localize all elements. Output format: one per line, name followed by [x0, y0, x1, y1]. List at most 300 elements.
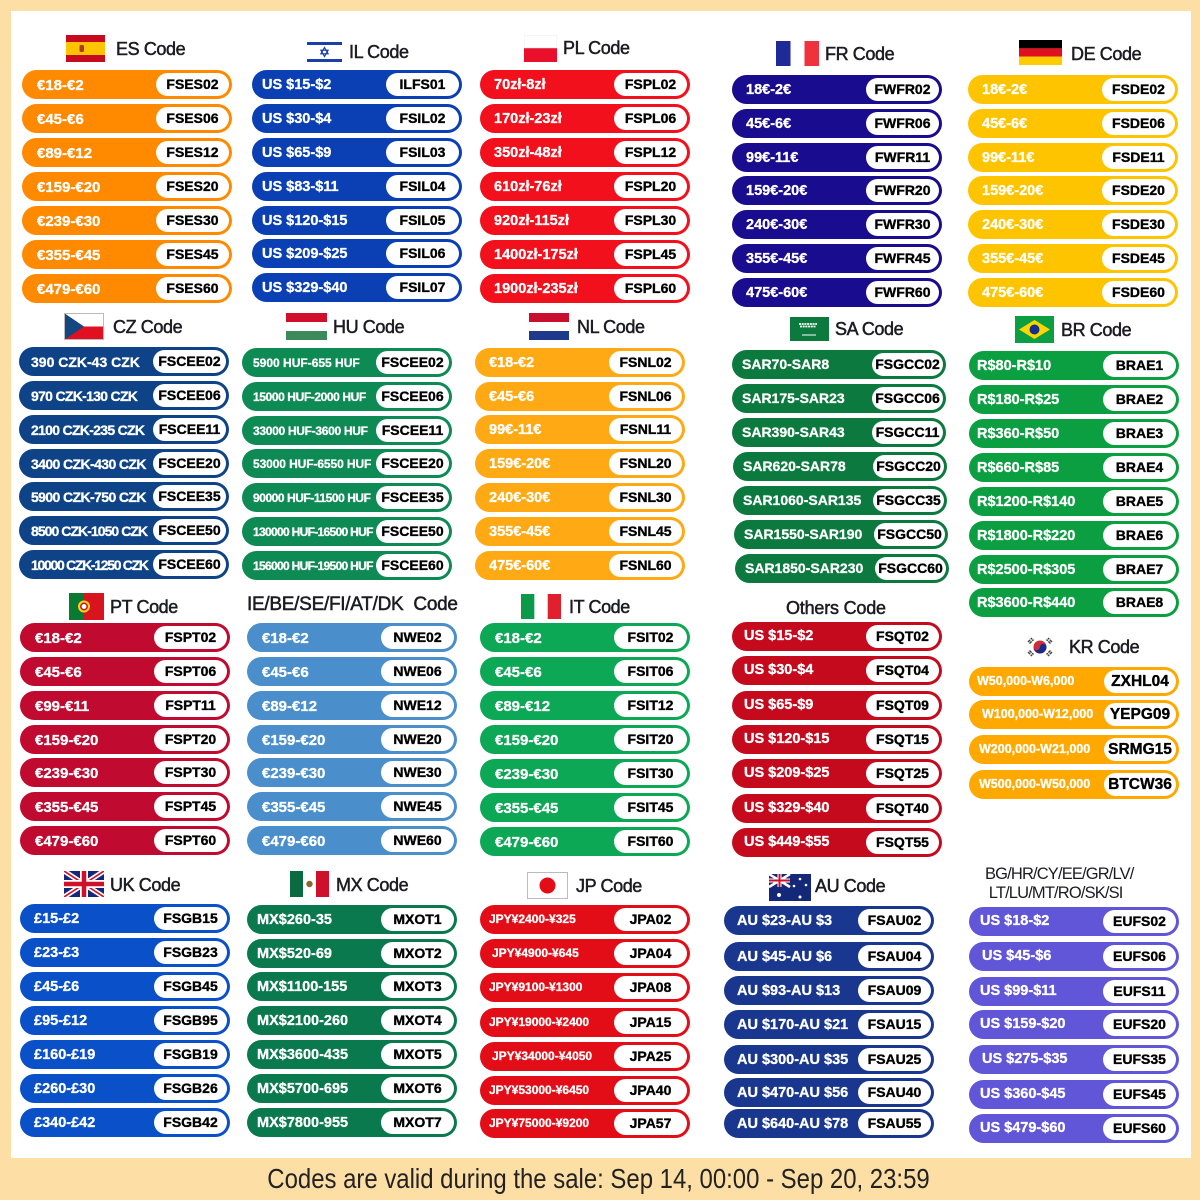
code row: 610zł-76zł FSPL20 [480, 172, 690, 201]
code row: AU $45-AU $6 FSAU04 [724, 942, 934, 971]
heading: AU Code [724, 871, 934, 901]
panel: AU codes [724, 871, 934, 1138]
code row: 99€-11€ FSDE11: 99€-11€ [982, 150, 1034, 166]
code row: 1900zł-235zł FSPL60: FSPL60 [625, 280, 676, 296]
code row: JPY¥2400-¥325 JPA02: JPA02 [630, 911, 671, 927]
code row: 159€-20€ FSDE20 [968, 176, 1178, 205]
code row: 350zł-48zł FSPL12: FSPL12 [625, 144, 676, 160]
code row: JPY¥4900-¥645 JPA04 [480, 939, 690, 968]
code row: MX$3600-435 MXOT5 [247, 1040, 457, 1069]
code row: 355€-45€ FWFR45: FWFR45 [874, 250, 930, 266]
code row: R$2500-R$305 BRAE7: R$2500-R$305 [977, 562, 1075, 578]
code row: €159-€20 NWE20: NWE20 [393, 731, 442, 747]
code row: 99€-11€ FWFR11: FWFR11 [875, 149, 930, 165]
code row: SAR620-SAR78 FSGCC20: FSGCC20 [876, 458, 941, 474]
code row: €479-€60 FSIT60: €479-€60 [495, 834, 558, 851]
code row: €355-€45 FSPT45: €355-€45 [35, 799, 98, 816]
code row: €239-€30 FSPT30: €239-€30 [35, 765, 98, 782]
code row: 18€-2€ FSDE02 [968, 75, 1178, 104]
code row: MX$1100-155 MXOT3: MXOT3 [393, 978, 442, 994]
heading text: HU Code [333, 317, 404, 337]
code row: 240€-30€ FWFR30: FWFR30 [874, 216, 930, 232]
code row: 45€-6€ FSDE06: 45€-6€ [982, 116, 1027, 132]
code row: US $209-$25 FSIL06: FSIL06 [400, 245, 445, 261]
code row: JPY¥53000-¥6450 JPA40: JPY¥53000-¥6450 [489, 1083, 589, 1097]
code row: 475€-60€ FSDE60: FSDE60 [1112, 284, 1165, 300]
code row: 99€-11€ FSDE11 [968, 143, 1178, 172]
code row: €479-€60 FSPT60 [20, 826, 230, 855]
code row: €45-€6 FSIT06: FSIT06 [628, 663, 673, 679]
icon: flag of Portugal [69, 593, 104, 620]
code row: 920zł-115zł FSPL30: FSPL30 [625, 212, 676, 228]
panel: IL codes [252, 42, 462, 302]
code row: JPY¥34000-¥4050 JPA25: JPY¥34000-¥4050 [492, 1049, 592, 1063]
code row: £160-£19 FSGB19 [20, 1040, 230, 1069]
code row: 53000 HUF-6550 HUF FSCEE20: FSCEE20 [381, 455, 444, 471]
code row: €45-€6 FSNL06: FSNL06 [619, 388, 672, 404]
code row: 1400zł-175zł FSPL45: 1400zł-175zł [494, 247, 578, 263]
code row: 170zł-23zł FSPL06 [480, 104, 690, 133]
code row: US $209-$25 FSIL06: US $209-$25 [262, 246, 347, 262]
code row: €18-€2 FSNL02 [475, 348, 685, 377]
heading: FR Code [776, 41, 894, 66]
code row: US $45-$6 EUFS06: US $45-$6 [982, 948, 1051, 964]
panel: FR codes [732, 41, 942, 307]
code row: US $65-$9 FSQT09: FSQT09 [876, 697, 929, 713]
code row: R$660-R$85 BRAE4 [969, 453, 1179, 482]
code row: AU $170-AU $21 FSAU15 [724, 1010, 934, 1039]
heading text: IT Code [569, 597, 630, 617]
code row: €479-€60 NWE60: €479-€60 [262, 833, 325, 850]
code row: MX$2100-260 MXOT4: MX$2100-260 [257, 1013, 348, 1029]
code row: JPY¥19000-¥2400 JPA15: JPA15 [630, 1014, 671, 1030]
code row: £23-£3 FSGB23: £23-£3 [34, 945, 79, 961]
code row: 355€-45€ FSNL45 [475, 517, 685, 546]
code row: 45€-6€ FSDE06 [968, 109, 1178, 138]
code row: 240€-30€ FSNL30: 240€-30€ [489, 490, 550, 506]
icon: flag of Israel [307, 42, 342, 62]
code row: €45-€6 NWE06: €45-€6 [262, 664, 309, 681]
code row: R$180-R$25 BRAE2: R$180-R$25 [977, 392, 1059, 408]
code row: €45-€6 NWE06 [247, 657, 457, 686]
code row: 240€-30€ FSNL30: FSNL30 [619, 489, 672, 505]
code row: W500,000-W50,000 BTCW36: W500,000-W50,000 [979, 777, 1090, 791]
code row: US $209-$25 FSQT25 [732, 759, 942, 788]
icon: flag of Poland [524, 35, 557, 62]
code row: 170zł-23zł FSPL06: FSPL06 [625, 110, 676, 126]
code row: US $18-$2 EUFS02: US $18-$2 [980, 913, 1049, 929]
code row: £95-£12 FSGB95 [20, 1006, 230, 1035]
code row: €355-€45 FSIT45 [480, 793, 690, 822]
code row: AU $640-AU $78 FSAU55: AU $640-AU $78 [737, 1116, 848, 1132]
heading: DE Code [1019, 40, 1142, 65]
code row: €18-€2 FSPT02 [20, 623, 230, 652]
code row: €159-€20 FSIT20: €159-€20 [495, 732, 558, 749]
code row: €239-€30 FSIT30 [480, 759, 690, 788]
code row: US $329-$40 FSQT40: FSQT40 [876, 800, 929, 816]
code row: €18-€2 FSNL02: €18-€2 [489, 355, 534, 371]
code row: MX$5700-695 MXOT6: MXOT6 [393, 1080, 442, 1096]
code row: JPY¥4900-¥645 JPA04: JPY¥4900-¥645 [492, 946, 579, 960]
code row: SAR175-SAR23 FSGCC06: SAR175-SAR23 [742, 390, 845, 406]
code row: €239-€30 FSES30 [22, 206, 232, 235]
code row: US $30-$4 FSQT04: US $30-$4 [744, 662, 813, 678]
code row: €45-€6 FSPT06: €45-€6 [35, 664, 82, 681]
code row: €239-€30 NWE30 [247, 758, 457, 787]
code row: 3400 CZK-430 CZK FSCEE20 [19, 449, 229, 478]
code row: AU $470-AU $56 FSAU40 [724, 1078, 934, 1107]
code row: €45-€6 FSIT06 [480, 657, 690, 686]
code row: €239-€30 FSPT30 [20, 758, 230, 787]
heading: UK Code [20, 871, 230, 901]
heading text: AU Code [815, 876, 885, 896]
icon: flag of Germany [1019, 40, 1062, 65]
code row: US $159-$20 EUFS20: EUFS20 [1113, 1016, 1166, 1032]
code row: W200,000-W21,000 SRMG15: SRMG15 [1108, 741, 1172, 758]
code row: £340-£42 FSGB42: FSGB42 [163, 1114, 218, 1130]
panel: MX codes [247, 871, 457, 1137]
code row: €479-€60 FSPT60: €479-€60 [35, 833, 98, 850]
code row: £160-£19 FSGB19: £160-£19 [34, 1047, 95, 1063]
code row: 355€-45€ FSDE45 [968, 244, 1178, 273]
code row: €479-€60 FSES60 [22, 274, 232, 303]
code row: £15-£2 FSGB15 [20, 904, 230, 933]
panel: Others codes [732, 598, 942, 857]
heading: Others Code: Others Code [786, 598, 886, 618]
code row: 170zł-23zł FSPL06: 170zł-23zł [494, 111, 562, 127]
code row: 90000 HUF-11500 HUF FSCEE35: 90000 HUF-11500 HUF [253, 491, 371, 505]
code row: SAR1550-SAR190 FSGCC50: FSGCC50 [877, 526, 942, 542]
code row: 33000 HUF-3600 HUF FSCEE11 [242, 416, 452, 445]
code row: US $479-$60 EUFS60 [969, 1114, 1179, 1143]
code row: 10000 CZK-1250 CZK FSCEE60: FSCEE60 [158, 556, 221, 572]
code row: €89-€12 NWE12 [247, 691, 457, 720]
code row: US $83-$11 FSIL04: US $83-$11 [262, 179, 339, 195]
code row: 90000 HUF-11500 HUF FSCEE35: FSCEE35 [381, 489, 444, 505]
code row: €45-€6 FSES06: €45-€6 [37, 111, 84, 128]
code row: €99-€11 FSPT11: €99-€11 [35, 698, 89, 715]
code row: R$3600-R$440 BRAE8: BRAE8 [1116, 594, 1163, 610]
panel: IT codes [480, 594, 690, 856]
code row: €45-€6 FSES06: FSES06 [166, 110, 219, 126]
code row: 5900 CZK-750 CZK FSCEE35: 5900 CZK-750 CZK [31, 489, 146, 505]
code row: US $329-$40 FSQT40: US $329-$40 [744, 800, 829, 816]
code row: 1900zł-235zł FSPL60: 1900zł-235zł [494, 281, 578, 297]
code row: MX$7800-955 MXOT7 [247, 1108, 457, 1137]
code row: R$360-R$50 BRAE3: BRAE3 [1116, 425, 1163, 441]
code row: 18€-2€ FWFR02: FWFR02 [874, 81, 930, 97]
code row: €45-€6 FSPT06 [20, 657, 230, 686]
code row: 53000 HUF-6550 HUF FSCEE20: 53000 HUF-6550 HUF [253, 457, 371, 471]
heading text: DE Code [1071, 44, 1141, 64]
code row: 350zł-48zł FSPL12: 350zł-48zł [494, 145, 562, 161]
code row: AU $23-AU $3 FSAU02: AU $23-AU $3 [737, 913, 832, 929]
code row: 2100 CZK-235 CZK FSCEE11: 2100 CZK-235 CZK [31, 422, 144, 438]
code row: US $329-$40 FSIL07: FSIL07 [400, 279, 445, 295]
code row: SAR175-SAR23 FSGCC06 [732, 384, 946, 413]
code row: US $159-$20 EUFS20: US $159-$20 [980, 1016, 1065, 1032]
code row: 45€-6€ FWFR06: 45€-6€ [746, 116, 791, 132]
code row: US $120-$15 FSQT15: US $120-$15 [744, 731, 829, 747]
code row: 355€-45€ FSNL45: FSNL45 [619, 523, 672, 539]
code row: US $99-$11 EUFS11: US $99-$11 [980, 983, 1057, 999]
code row: €18-€2 FSIT02: €18-€2 [495, 630, 542, 647]
icon: flag of Japan [527, 872, 568, 899]
code row: US $360-$45 EUFS45 [969, 1080, 1179, 1109]
code row: €18-€2 FSES02: FSES02 [166, 76, 219, 92]
code row: €159-€20 FSPT20: €159-€20 [35, 732, 98, 749]
code row: R$1200-R$140 BRAE5: R$1200-R$140 [977, 494, 1075, 510]
code row: US $209-$25 FSIL06 [252, 239, 462, 268]
code row: €18-€2 FSPT02: FSPT02 [165, 629, 216, 645]
code row: MX$5700-695 MXOT6: MX$5700-695 [257, 1081, 348, 1097]
code row: AU $93-AU $13 FSAU09: FSAU09 [868, 982, 921, 998]
code row: 99€-11€ FSNL11: FSNL11 [620, 421, 671, 437]
code row: €89-€12 FSES12: €89-€12 [37, 145, 92, 162]
code row: R$80-R$10 BRAE1: R$80-R$10 [977, 358, 1051, 374]
code row: €18-€2 FSNL02: FSNL02 [619, 354, 672, 370]
code row: €89-€12 FSES12 [22, 138, 232, 167]
code row: US $30-$4 FSIL02 [252, 104, 462, 133]
code row: £160-£19 FSGB19: FSGB19 [163, 1046, 218, 1062]
panel: IE/BE/SE/FI/AT/DK codes [247, 594, 458, 855]
code row: MX$520-69 MXOT2: MXOT2 [393, 945, 442, 961]
code row: JPY¥75000-¥9200 JPA57: JPA57 [630, 1115, 671, 1131]
code row: £340-£42 FSGB42: £340-£42 [34, 1115, 95, 1131]
code row: 240€-30€ FSDE30: FSDE30 [1112, 216, 1165, 232]
code row: 90000 HUF-11500 HUF FSCEE35 [242, 483, 452, 512]
code row: AU $93-AU $13 FSAU09: AU $93-AU $13 [737, 983, 840, 999]
code row: JPY¥75000-¥9200 JPA57 [480, 1109, 690, 1138]
code row: US $83-$11 FSIL04: FSIL04 [400, 178, 445, 194]
code row: AU $23-AU $3 FSAU02 [724, 906, 934, 935]
icon: flag of Brazil [1015, 316, 1054, 343]
code row: 390 CZK-43 CZK FSCEE02 [19, 347, 229, 376]
heading: PT Code [69, 593, 178, 620]
code row: AU $470-AU $56 FSAU40: AU $470-AU $56 [737, 1085, 848, 1101]
code row: MX$260-35 MXOT1: MX$260-35 [257, 912, 332, 928]
code row: JPY¥19000-¥2400 JPA15 [480, 1008, 690, 1037]
code row: 10000 CZK-1250 CZK FSCEE60 [19, 550, 229, 579]
code row: JPY¥75000-¥9200 JPA57: JPY¥75000-¥9200 [489, 1116, 589, 1130]
code row: R$360-R$50 BRAE3 [969, 419, 1179, 448]
code row: JPY¥9100-¥1300 JPA08: JPA08 [630, 979, 671, 995]
code row: 159€-20€ FSNL20: 159€-20€ [489, 456, 550, 472]
code row: €89-€12 FSIT12 [480, 691, 690, 720]
code row: SAR70-SAR8 FSGCC02: SAR70-SAR8 [742, 356, 829, 372]
code row: AU $640-AU $78 FSAU55: FSAU55 [868, 1115, 921, 1131]
code row: 970 CZK-130 CZK FSCEE06: FSCEE06 [158, 387, 221, 403]
code row: AU $45-AU $6 FSAU04: AU $45-AU $6 [737, 949, 832, 965]
code row: US $449-$55 FSQT55: US $449-$55 [744, 834, 829, 850]
code row: US $209-$25 FSQT25: FSQT25 [876, 765, 929, 781]
code row: SAR390-SAR43 FSGCC11 [732, 418, 946, 447]
code row: US $30-$4 FSQT04 [732, 656, 942, 685]
code row: 3400 CZK-430 CZK FSCEE20: FSCEE20 [158, 455, 221, 471]
code row: 5900 CZK-750 CZK FSCEE35: FSCEE35 [158, 488, 221, 504]
code row: AU $170-AU $21 FSAU15: AU $170-AU $21 [737, 1017, 848, 1033]
code row: US $15-$2 ILFS01: ILFS01 [400, 76, 445, 92]
code row: £45-£6 FSGB45: £45-£6 [34, 979, 79, 995]
code row: 5900 HUF-655 HUF FSCEE02 [242, 348, 452, 377]
code row: AU $640-AU $78 FSAU55 [724, 1109, 934, 1138]
code row: €159-€20 NWE20: €159-€20 [262, 732, 325, 749]
code row: SAR175-SAR23 FSGCC06: FSGCC06 [875, 390, 940, 406]
heading: NL Code [529, 313, 645, 340]
code row: €479-€60 FSIT60 [480, 827, 690, 856]
code row: R$180-R$25 BRAE2 [969, 385, 1179, 414]
heading: IL Code [307, 42, 409, 62]
code row: US $15-$2 FSQT02: FSQT02 [876, 628, 929, 644]
heading text: IL Code [349, 42, 409, 62]
panel: JP codes [480, 871, 690, 1138]
code row: W100,000-W12,000 YEPG09: W100,000-W12,000 [982, 707, 1093, 721]
code row: JPY¥2400-¥325 JPA02: JPY¥2400-¥325 [489, 912, 576, 926]
code row: €45-€6 FSPT06: FSPT06 [165, 663, 216, 679]
icon: flag of United Kingdom [64, 871, 104, 897]
heading text: JP Code [576, 876, 642, 896]
code row: 156000 HUF-19500 HUF FSCEE60 [242, 551, 452, 580]
code row: €239-€30 NWE30: NWE30 [393, 764, 442, 780]
heading text: UK Code [110, 875, 180, 895]
code row: SAR1060-SAR135 FSGCC35: SAR1060-SAR135 [743, 492, 861, 508]
code row: US $120-$15 FSQT15 [732, 725, 942, 754]
code row: 970 CZK-130 CZK FSCEE06 [19, 381, 229, 410]
code row: JPY¥34000-¥4050 JPA25: JPA25 [630, 1048, 671, 1064]
code row: 45€-6€ FSDE06: FSDE06 [1112, 115, 1165, 131]
code row: SAR1850-SAR230 FSGCC60: SAR1850-SAR230 [745, 560, 863, 576]
code row: SAR1060-SAR135 FSGCC35 [733, 486, 947, 515]
code row: 18€-2€ FWFR02: 18€-2€ [746, 82, 791, 98]
code row: W50,000-W6,000 ZXHL04: ZXHL04 [1111, 673, 1169, 690]
code row: €89-€12 NWE12: NWE12 [393, 697, 442, 713]
code row: £45-£6 FSGB45 [20, 972, 230, 1001]
code row: €18-€2 NWE02: €18-€2 [262, 630, 309, 647]
code row: €479-€60 FSIT60: FSIT60 [628, 833, 673, 849]
code row: R$660-R$85 BRAE4: R$660-R$85 [977, 460, 1059, 476]
code row: US $15-$2 ILFS01: US $15-$2 [262, 77, 331, 93]
code row: €239-€30 FSIT30: €239-€30 [495, 766, 558, 783]
heading text: KR Code [1069, 637, 1139, 657]
heading: JP Code [480, 871, 690, 901]
code row: R$1800-R$220 BRAE6: R$1800-R$220 [977, 528, 1075, 544]
code row: US $18-$2 EUFS02: EUFS02 [1113, 913, 1166, 929]
code row: €479-€60 FSES60: FSES60 [166, 280, 219, 296]
heading text: ES Code [116, 39, 185, 59]
code row: JPY¥53000-¥6450 JPA40 [480, 1076, 690, 1105]
code row: €159-€20 FSPT20: FSPT20 [165, 731, 216, 747]
code row: AU $470-AU $56 FSAU40: FSAU40 [868, 1084, 921, 1100]
code row: €239-€30 FSES30: €239-€30 [37, 213, 100, 230]
panel: CZ codes [19, 313, 229, 579]
code row: 15000 HUF-2000 HUF FSCEE06: 15000 HUF-2000 HUF [253, 390, 366, 404]
code row: €355-€45 NWE45 [247, 792, 457, 821]
panel: DE codes [968, 40, 1178, 307]
code row: SAR620-SAR78 FSGCC20 [733, 452, 947, 481]
code row: €89-€12 FSIT12: €89-€12 [495, 698, 550, 715]
heading: IE/BE/SE/FI/AT/DK Code: IE/BE/SE/FI/AT/DK Code [247, 594, 458, 615]
code row: W500,000-W50,000 BTCW36: BTCW36 [1108, 776, 1172, 793]
code row: SAR70-SAR8 FSGCC02 [732, 350, 946, 379]
code row: £95-£12 FSGB95: FSGB95 [163, 1012, 218, 1028]
code row: 130000 HUF-16500 HUF FSCEE50: 130000 HUF-16500 HUF [253, 525, 373, 539]
code row: 475€-60€ FSNL60: 475€-60€ [489, 558, 550, 574]
code row: €159-€20 FSES20 [22, 172, 232, 201]
code row: €479-€60 FSES60: €479-€60 [37, 281, 100, 298]
code row: €159-€20 FSPT20 [20, 725, 230, 754]
code row: €45-€6 FSNL06 [475, 382, 685, 411]
code row: 970 CZK-130 CZK FSCEE06: 970 CZK-130 CZK [31, 388, 137, 404]
code row: 99€-11€ FWFR11 [732, 143, 942, 172]
code row: JPY¥4900-¥645 JPA04: JPA04 [630, 945, 671, 961]
code row: US $360-$45 EUFS45: EUFS45 [1113, 1086, 1166, 1102]
code row: US $275-$35 EUFS35: US $275-$35 [982, 1051, 1067, 1067]
code row: 475€-60€ FWFR60 [732, 278, 942, 307]
code row: 159€-20€ FSDE20: 159€-20€ [982, 183, 1043, 199]
code row: 5900 CZK-750 CZK FSCEE35 [19, 482, 229, 511]
code row: US $329-$40 FSQT40 [732, 794, 942, 823]
code row: SAR1060-SAR135 FSGCC35: FSGCC35 [876, 492, 941, 508]
code row: MX$3600-435 MXOT5: MXOT5 [393, 1046, 442, 1062]
code row: JPY¥2400-¥325 JPA02 [480, 905, 690, 934]
code row: 10000 CZK-1250 CZK FSCEE60: 10000 CZK-1250 CZK [31, 557, 148, 573]
heading: CZ Code [64, 313, 182, 340]
code row: 159€-20€ FWFR20: 159€-20€ [746, 183, 807, 199]
code row: JPY¥34000-¥4050 JPA25 [480, 1042, 690, 1071]
code row: W200,000-W21,000 SRMG15 [969, 735, 1179, 764]
heading: PL Code [524, 35, 630, 62]
code row: 70zł-8zł FSPL02 [480, 70, 690, 99]
panel: SA codes [732, 317, 949, 583]
heading text: SA Code [835, 319, 903, 339]
code row: AU $170-AU $21 FSAU15: FSAU15 [868, 1016, 921, 1032]
code row: 350zł-48zł FSPL12 [480, 138, 690, 167]
code row: 8500 CZK-1050 CZK FSCEE50: 8500 CZK-1050 CZK [31, 523, 147, 539]
code row: US $83-$11 FSIL04 [252, 172, 462, 201]
code row: JPY¥53000-¥6450 JPA40: JPA40 [630, 1082, 671, 1098]
code row: MX$2100-260 MXOT4 [247, 1006, 457, 1035]
code row: €239-€30 FSIT30: FSIT30 [628, 765, 673, 781]
code row: US $45-$6 EUFS06: EUFS06 [1113, 948, 1166, 964]
code row: 355€-45€ FWFR45: 355€-45€ [746, 251, 807, 267]
code row: €159-€20 FSES20: €159-€20 [37, 179, 100, 196]
panel: ES codes [22, 35, 232, 303]
code row: 130000 HUF-16500 HUF FSCEE50: FSCEE50 [381, 523, 444, 539]
code row: JPY¥9100-¥1300 JPA08 [480, 973, 690, 1002]
code row: €99-€11 FSPT11 [20, 691, 230, 720]
code row: 475€-60€ FSDE60 [968, 278, 1178, 307]
code row: 920zł-115zł FSPL30: 920zł-115zł [494, 213, 569, 229]
code row: €479-€60 NWE60 [247, 826, 457, 855]
code row: 3400 CZK-430 CZK FSCEE20: 3400 CZK-430 CZK [31, 456, 146, 472]
code row: R$80-R$10 BRAE1 [969, 351, 1179, 380]
code row: £23-£3 FSGB23: FSGB23 [163, 944, 218, 960]
code row: US $45-$6 EUFS06 [969, 942, 1179, 971]
heading text: PL Code [563, 38, 630, 58]
code row: €89-€12 FSES12: FSES12 [166, 144, 219, 160]
code row: MX$1100-155 MXOT3: MX$1100-155 [257, 979, 347, 995]
code row: 475€-60€ FSNL60 [475, 551, 685, 580]
icon: flag of Australia [769, 874, 811, 901]
code row: €18-€2 FSES02 [22, 70, 232, 99]
code row: SAR390-SAR43 FSGCC11: SAR390-SAR43 [742, 424, 845, 440]
code row: €355-€45 FSES45: €355-€45 [37, 247, 100, 264]
code row: 920zł-115zł FSPL30 [480, 206, 690, 235]
code row: €355-€45 FSES45: FSES45 [166, 246, 219, 262]
code row: AU $23-AU $3 FSAU02: FSAU02 [868, 912, 921, 928]
code row: US $15-$2 ILFS01 [252, 70, 462, 99]
code row: 53000 HUF-6550 HUF FSCEE20 [242, 449, 452, 478]
